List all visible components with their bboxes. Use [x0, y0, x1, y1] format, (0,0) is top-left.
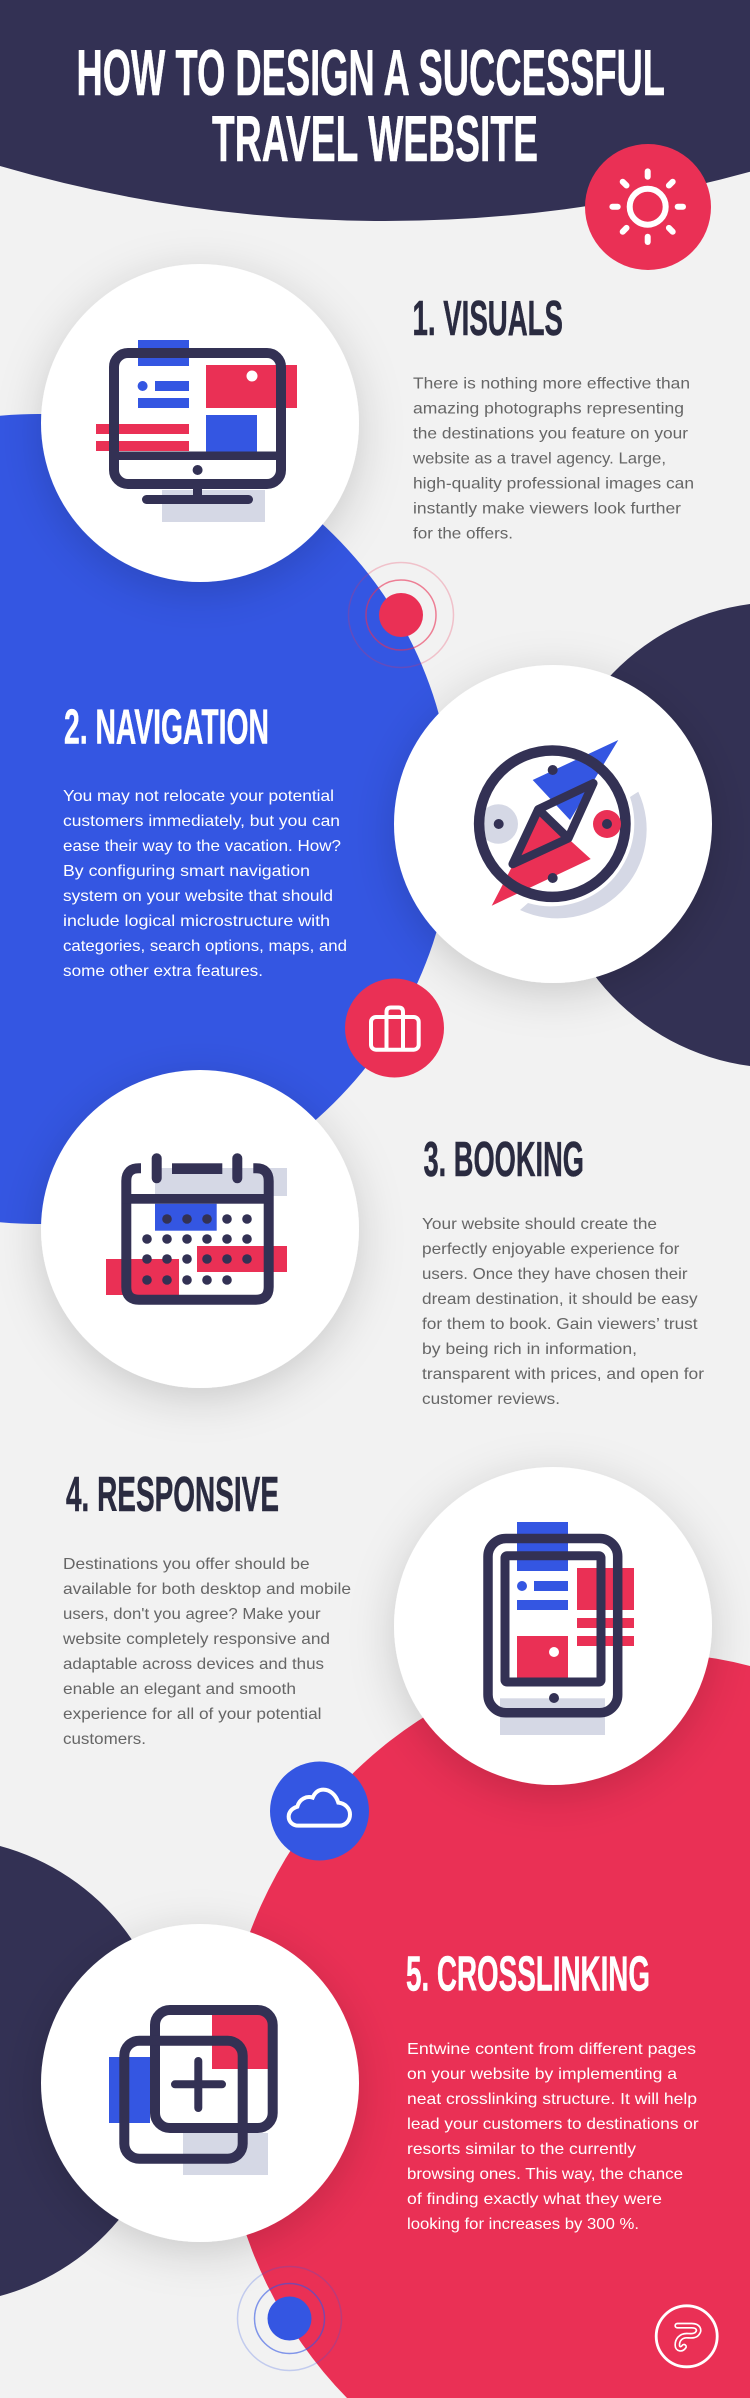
- icon: logo: [656, 2306, 717, 2367]
- text: visuals body: amazing photographs representing: [413, 400, 684, 418]
- text: booking body: by being rich in information,: [422, 1341, 637, 1358]
- text: navigation body: some other extra features.: [63, 963, 263, 980]
- text: crosslinking body: neat crosslinking structure. It will help: [407, 2091, 697, 2108]
- text: crosslinking body: looking for increases by 300 %.: [407, 2216, 639, 2233]
- text: responsive body: enable an elegant and smooth: [63, 1681, 296, 1698]
- text: navigation body: By configuring smart navigation: [63, 863, 310, 880]
- background: red circle: [222, 1653, 750, 2398]
- text: crosslinking body: browsing ones. This way, the chance: [407, 2166, 683, 2183]
- text: navigation body: system on your website that should: [63, 888, 333, 905]
- text: visuals body: instantly make viewers look further: [413, 500, 682, 518]
- icon: compass: [479, 740, 647, 918]
- text: booking body: [422, 1216, 705, 1408]
- text: responsive body: Destinations you offer should be: [63, 1556, 310, 1573]
- text: crosslinking body: resorts similar to the currently: [407, 2141, 636, 2158]
- text: booking body: transparent with prices, and open for: [422, 1366, 705, 1383]
- text: booking body: for them to book. Gain viewers’ trust: [422, 1316, 698, 1333]
- text: visuals body: for the offers.: [413, 526, 513, 542]
- title: [76, 36, 665, 175]
- background: dark circle left: [0, 1846, 172, 2296]
- text: navigation body: include logical microstructure with: [63, 913, 330, 930]
- text: booking body: perfectly enjoyable experience for: [422, 1241, 680, 1258]
- text: booking body: dream destination, it should be easy: [422, 1291, 698, 1308]
- icon: sun badge: [585, 144, 711, 270]
- text: booking body: Your website should create the: [422, 1216, 657, 1233]
- text: responsive body: customers.: [63, 1731, 146, 1748]
- icon: suitcase badge: [345, 978, 444, 1078]
- target marker blue: [238, 2266, 342, 2370]
- header band: [0, 0, 750, 221]
- heading: 4. responsive: 4. RESPONSIVE: [66, 1468, 279, 1522]
- text: visuals body: There is nothing more effective than: [413, 376, 690, 392]
- text: crosslinking body: of finding exactly what they were: [407, 2191, 662, 2208]
- text: visuals body: the destinations you feature on your: [413, 426, 689, 442]
- text: booking body: customer reviews.: [422, 1391, 560, 1408]
- target marker red: [348, 562, 454, 668]
- text: navigation body: You may not relocate your potential: [63, 788, 334, 805]
- panel: booking circle: [41, 1070, 359, 1388]
- text: responsive body: available for both desktop and mobile: [63, 1581, 351, 1598]
- heading: 2. navigation: 2. NAVIGATION: [64, 700, 269, 754]
- text: visuals body: high-quality professional images can: [413, 476, 694, 492]
- text: responsive body: users, don't you agree? Make your: [63, 1606, 321, 1623]
- text: crosslinking body: lead your customers to destinations or: [407, 2116, 699, 2133]
- background: blue circle: [0, 414, 453, 1224]
- text: navigation body: customers immediately, but you can: [63, 813, 340, 830]
- panel: crosslinking circle: [41, 1924, 359, 2242]
- icon: desktop monitor: [96, 340, 297, 522]
- icon: calendar: [106, 1158, 287, 1300]
- text: crosslinking body: Entwine content from different pages: [407, 2041, 696, 2058]
- heading: 1. visuals: 1. VISUALS: [412, 292, 563, 346]
- icon: cloud badge: [270, 1762, 369, 1860]
- text: navigation body: categories, search options, maps, and: [63, 938, 347, 955]
- panel: visuals circle: [41, 264, 359, 582]
- background: dark circle right: [547, 604, 750, 1066]
- text: booking body: users. Once they have chosen their: [422, 1266, 688, 1283]
- text: responsive body: experience for all of your potential: [63, 1706, 322, 1723]
- text: navigation body: [63, 788, 347, 980]
- text: navigation body: ease their way to the vacation. How?: [63, 838, 341, 855]
- text: visuals body: website as a travel agency. Large,: [412, 450, 666, 468]
- panel: responsive circle: [394, 1467, 712, 1785]
- text: crosslinking body: on your website by implementing a: [407, 2066, 677, 2083]
- heading: 3. booking: 3. BOOKING: [424, 1133, 584, 1187]
- text: responsive body: website completely responsive and: [62, 1631, 330, 1648]
- icon: tablet: [488, 1522, 634, 1735]
- text: responsive body: [62, 1556, 351, 1748]
- text: responsive body: adaptable across devices and thus: [63, 1656, 324, 1673]
- text: visuals body: [412, 376, 694, 542]
- panel: navigation circle: [394, 665, 712, 983]
- icon: overlapping pages with plus: [109, 2010, 273, 2175]
- text: crosslinking body: [407, 2041, 699, 2233]
